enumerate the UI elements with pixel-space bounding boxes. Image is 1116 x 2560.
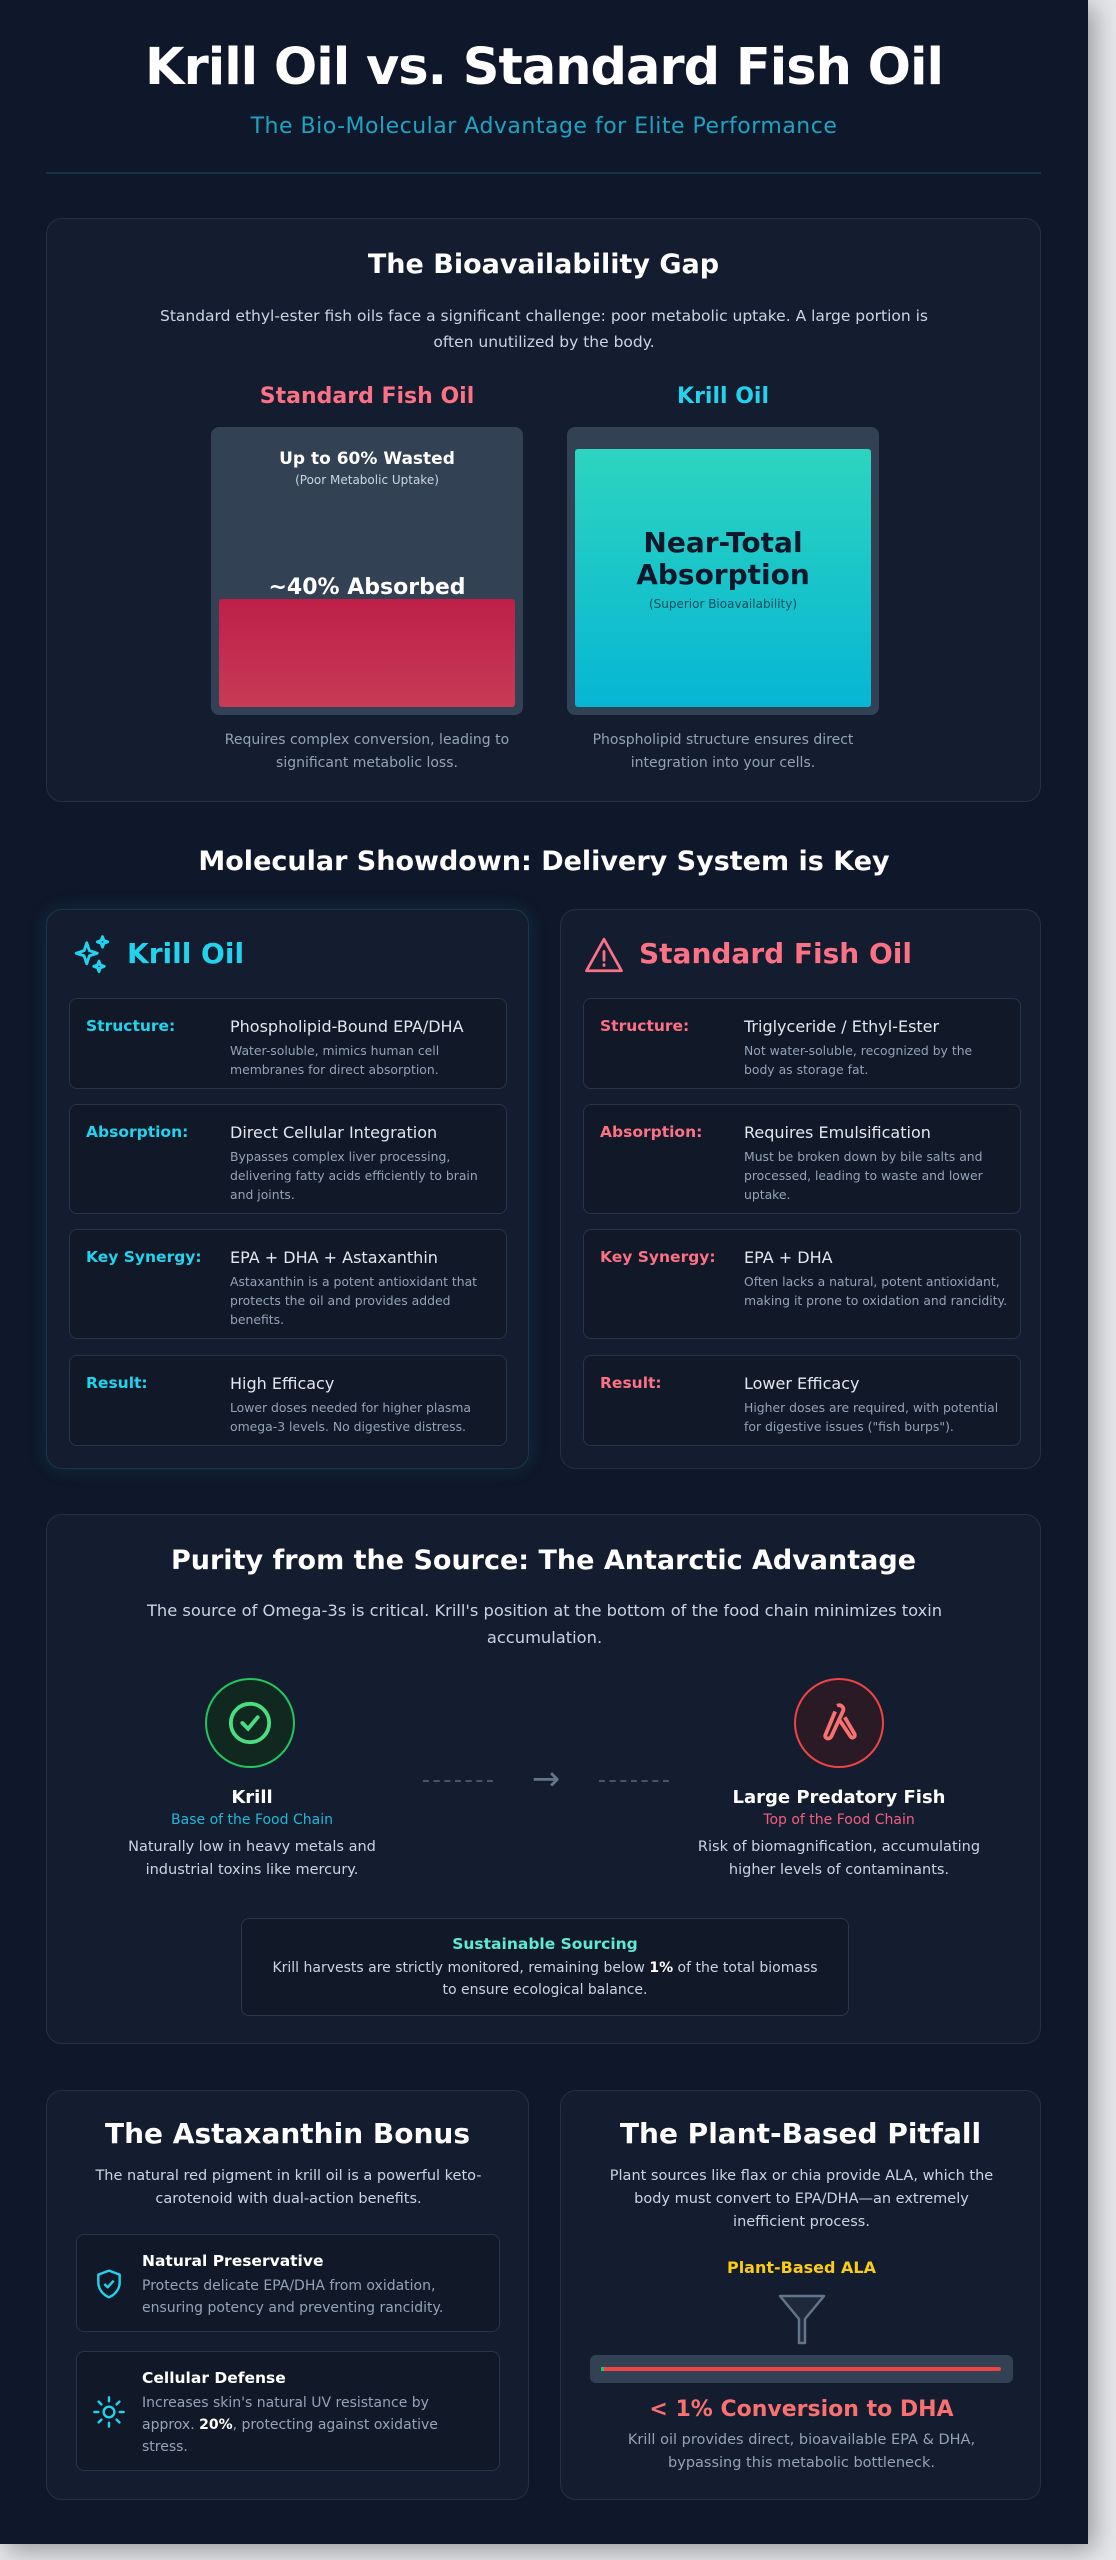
icon: sparkles <box>74 935 110 974</box>
row: synergy: Astaxanthin is a potent antioxidant that protects the oil and provides added benefits. <box>230 1274 477 1327</box>
intro: The natural red pigment in krill oil is a powerful keto-carotenoid with dual-action benefits. <box>95 2168 482 2207</box>
intro text: Standard ethyl-ester fish oils face a significant challenge: poor metabolic uptake. A large portion is often unutilized by the body. <box>160 307 928 351</box>
conversion bar <box>590 2355 1013 2383</box>
column label fish: Standard Fish Oil <box>260 384 474 409</box>
row: result: Higher doses are required, with potential for digestive issues ("fish burps"). <box>744 1400 998 1434</box>
panel: krill oil card <box>46 909 529 1469</box>
row: structure: Structure: <box>600 1017 689 1035</box>
caption krill: Phospholipid structure ensures direct integration into your cells. <box>593 732 853 771</box>
intro text: The source of Omega-3s is critical. Krill's position at the bottom of the food chain minimizes toxin accumulation. <box>147 1601 942 1647</box>
bar: krill oil: Near-Total <box>643 526 803 559</box>
feature: preservative: Protects delicate EPA/DHA from oxidation, ensuring potency and preventing rancidity. <box>142 2278 443 2316</box>
row: absorption <box>69 1104 507 1214</box>
bar: fish oil: (Poor Metabolic Uptake) <box>295 473 439 487</box>
row: absorption: Direct Cellular Integration <box>230 1123 437 1142</box>
row: absorption: Must be broken down by bile salts and processed, leading to waste and lower uptake. <box>744 1149 983 1202</box>
heading: The Plant-Based Pitfall <box>620 2117 981 2150</box>
row: result: Result: <box>600 1374 662 1392</box>
krill label <box>128 1787 376 1878</box>
caption: Krill oil provides direct, bioavailable EPA & DHA, bypassing this metabolic bottleneck. <box>628 2432 975 2471</box>
row: synergy <box>69 1229 507 1339</box>
feature: cellular defense: Cellular Defense <box>142 2369 286 2387</box>
row: absorption: Bypasses complex liver processing, delivering fatty acids efficiently to brain and joints. <box>230 1149 478 1202</box>
icon: warning <box>585 938 623 972</box>
bar: fish oil: ~40% Absorbed <box>268 575 466 600</box>
row: absorption: Absorption: <box>600 1123 702 1141</box>
row: structure: Not water-soluble, recognized by the body as storage fat. <box>744 1043 972 1077</box>
icon: fish hazard <box>794 1678 884 1768</box>
row: result: Lower Efficacy <box>744 1374 859 1393</box>
feature: preservative <box>76 2234 500 2332</box>
row: absorption <box>583 1104 1021 1214</box>
row: synergy: Key Synergy: <box>600 1248 716 1266</box>
panel: astaxanthin <box>46 2090 529 2500</box>
feature: preservative: Natural Preservative <box>142 2252 324 2270</box>
label: plant ALA: Plant-Based ALA <box>727 2258 876 2277</box>
krill label: Krill <box>231 1787 273 1808</box>
panel: bioavailability gap <box>46 218 1041 802</box>
row: synergy: EPA + DHA + Astaxanthin <box>230 1248 438 1267</box>
icon: krill check <box>205 1678 295 1768</box>
fish label: Large Predatory Fish <box>732 1787 946 1808</box>
icon: sun <box>93 2396 125 2428</box>
krill label: Base of the Food Chain <box>171 1812 333 1828</box>
row: synergy: Key Synergy: <box>86 1248 202 1266</box>
row: synergy <box>583 1229 1021 1339</box>
row: synergy: EPA + DHA <box>744 1248 833 1267</box>
card title: Standard Fish Oil <box>639 937 912 970</box>
callout: sustainable sourcing: Sustainable Sourcing <box>452 1935 638 1953</box>
row: structure: Triglyceride / Ethyl-Ester <box>744 1017 939 1036</box>
row: result: High Efficacy <box>230 1374 334 1393</box>
row: result: Result: <box>86 1374 148 1392</box>
subtitle: The Bio-Molecular Advantage for Elite Performance <box>251 114 837 139</box>
panel: fish oil card <box>560 909 1041 1469</box>
row: structure: Structure: <box>86 1017 175 1035</box>
caption fish: Requires complex conversion, leading to significant metabolic loss. <box>225 732 509 771</box>
heading: molecular showdown: Molecular Showdown: Delivery System is Key <box>198 846 890 877</box>
callout: sustainable sourcing: Krill harvests are strictly monitored, remaining below 1% of the total biomass to ensure ecological balance. <box>272 1960 818 1998</box>
row: synergy: Often lacks a natural, potent antioxidant, making it prone to oxidation and rancidity. <box>744 1274 1007 1308</box>
row: structure: Water-soluble, mimics human cell membranes for direct absorption. <box>230 1043 439 1077</box>
row: structure <box>69 998 507 1089</box>
row: absorption: Requires Emulsification <box>744 1123 931 1142</box>
bar: krill oil <box>567 427 879 715</box>
panel: plant-based pitfall <box>560 2090 1041 2500</box>
callout: sustainable sourcing <box>241 1918 849 2016</box>
bar: krill oil: (Superior Bioavailability) <box>649 597 797 611</box>
fish label: Top of the Food Chain <box>763 1812 915 1828</box>
heading: The Astaxanthin Bonus <box>105 2117 470 2150</box>
intro: Plant sources like flax or chia provide ALA, which the body must convert to EPA/DHA—an extremely inefficient process. <box>610 2168 993 2230</box>
krill label: Naturally low in heavy metals and industrial toxins like mercury. <box>128 1839 376 1878</box>
fish label <box>698 1787 980 1878</box>
row: result <box>69 1355 507 1446</box>
fish label: Risk of biomagnification, accumulating higher levels of contaminants. <box>698 1839 980 1878</box>
title: Krill Oil vs. Standard Fish Oil <box>145 38 943 97</box>
row: structure <box>583 998 1021 1089</box>
row: result <box>583 1355 1021 1446</box>
bar: krill oil: Absorption <box>636 558 810 591</box>
feature: cellular defense <box>76 2351 500 2471</box>
panel: purity <box>46 1514 1041 2044</box>
heading: Purity from the Source: The Antarctic Advantage <box>171 1545 916 1576</box>
row: result: Lower doses needed for higher plasma omega-3 levels. No digestive distress. <box>230 1400 471 1434</box>
stat: < 1% Conversion to DHA <box>649 2397 954 2422</box>
column label krill: Krill Oil <box>677 384 769 409</box>
icon: funnel <box>778 2294 826 2344</box>
bar: fish oil: Up to 60% Wasted <box>279 449 455 469</box>
feature: cellular defense: Increases skin's natural UV resistance by approx. 20%, protecting against oxidative stress. <box>142 2395 438 2455</box>
card title: Krill Oil <box>127 937 244 970</box>
heading: The Bioavailability Gap <box>368 249 719 280</box>
arrow: → <box>532 1759 560 1799</box>
row: structure: Phospholipid-Bound EPA/DHA <box>230 1017 464 1036</box>
icon: shield <box>97 2270 121 2298</box>
row: absorption: Absorption: <box>86 1123 188 1141</box>
bar: fish oil <box>211 427 523 715</box>
